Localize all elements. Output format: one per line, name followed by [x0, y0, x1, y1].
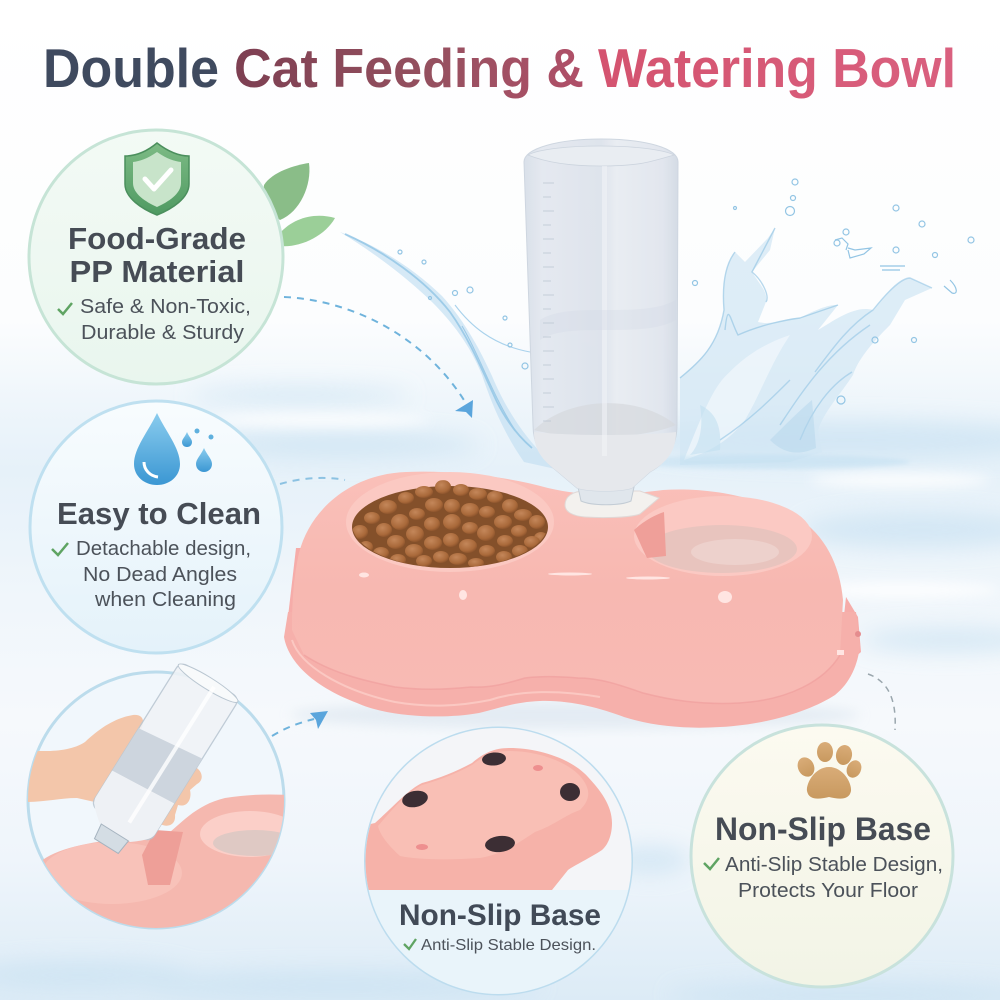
text block: Detachable design, [76, 538, 251, 560]
heading: Non-Slip Base [399, 899, 601, 932]
heading: Food-Grade [68, 221, 246, 256]
bowl handles [286, 548, 310, 634]
bottle tilted [77, 660, 241, 865]
water splash [340, 179, 974, 470]
base lip [284, 612, 860, 728]
text block [52, 538, 251, 611]
text block: Protects Your Floor [738, 880, 918, 902]
title: Double [43, 37, 219, 99]
hand [27, 715, 202, 826]
right bowl with water [634, 496, 812, 576]
icon: water drops [134, 413, 214, 485]
text block: Anti-Slip Stable Design. [421, 937, 596, 954]
text block [58, 296, 251, 344]
text block: Anti-Slip Stable Design, [725, 854, 943, 876]
panel: easy to clean [30, 401, 282, 653]
bottle holder [565, 491, 659, 518]
text block: when Cleaning [94, 589, 236, 611]
bowl [284, 472, 861, 729]
heading [68, 221, 246, 289]
body [292, 472, 843, 703]
panel: bowl underside [364, 726, 633, 996]
icon: leaves [264, 163, 335, 246]
title [43, 37, 956, 99]
bottle [524, 139, 678, 518]
arrow: clean to bowl [280, 478, 345, 484]
heading: Easy to Clean [57, 496, 261, 531]
right splash [680, 228, 932, 465]
left bowl with kibble [346, 472, 554, 572]
droplets [398, 179, 974, 404]
left stream [340, 232, 560, 470]
body highlights [359, 572, 844, 655]
text block: Safe & Non-Toxic, [80, 296, 251, 318]
panel: hand filling bottle [27, 660, 300, 935]
icon: shield [125, 143, 189, 215]
panel: non-slip base [691, 725, 953, 987]
arrow: material to bottle [284, 297, 473, 418]
arrow: base to bowl [868, 674, 895, 730]
title: Cat Feeding & [234, 37, 584, 99]
text block: Durable & Sturdy [81, 322, 244, 344]
text block: No Dead Angles [83, 564, 237, 586]
heading: PP Material [70, 254, 244, 289]
pink bowl [40, 794, 290, 935]
heading: Non-Slip Base [715, 811, 931, 847]
caption background [368, 890, 628, 994]
upside-down bowl [362, 748, 612, 890]
icon: paw [795, 742, 864, 799]
panel: food-grade material [29, 130, 335, 384]
text block [704, 854, 943, 902]
arrow: hand to bowl [272, 711, 328, 736]
title: Watering Bowl [598, 37, 956, 99]
